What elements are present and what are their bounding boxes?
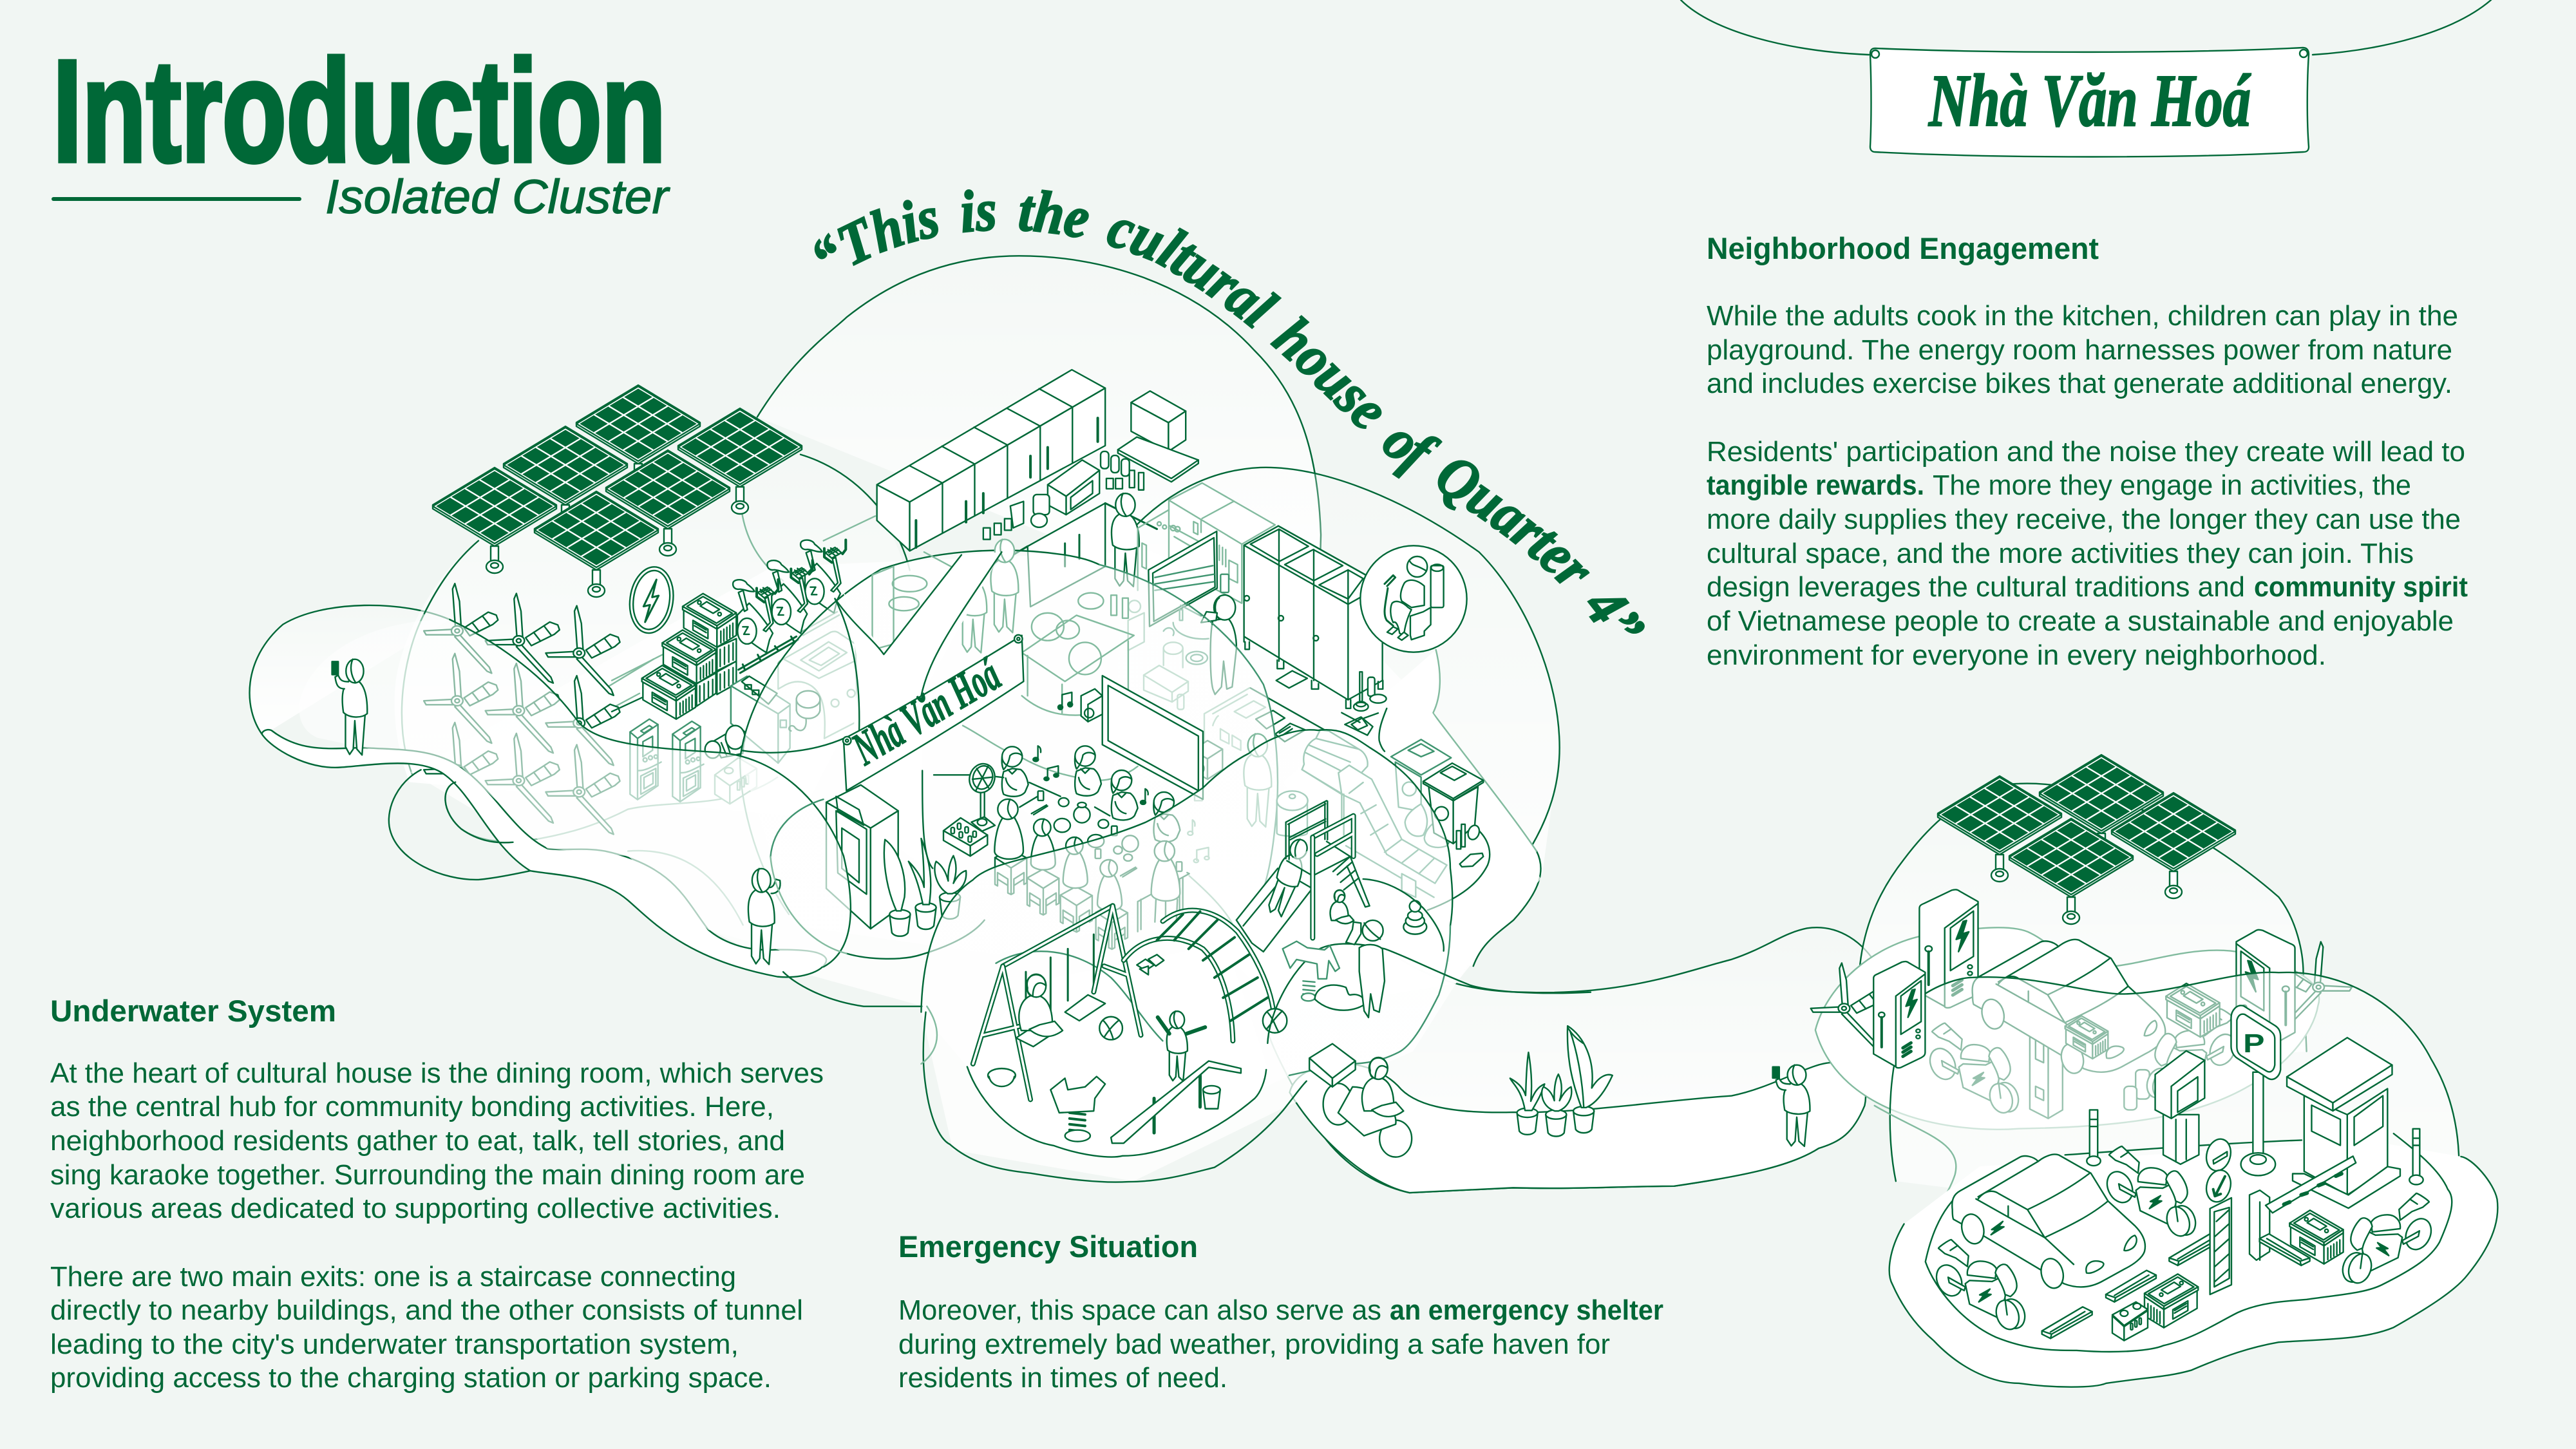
panel: kitchen dome [742,256,1321,644]
icon: upper small battery [2065,1016,2108,1059]
text block: emergency paragraph: residents in times of need. [898,1362,1227,1394]
icon: generator machine [778,632,858,739]
icon: battery by barrier [2289,1210,2344,1264]
text block: neighborhood paragraph 2: cultural space, and the more activities they can join. This [1707,538,2414,569]
panel: main floor outlines [770,799,985,1007]
subtitle: Isolated Cluster [325,170,670,223]
person: parent [1346,920,1385,1018]
parking front items [1873,961,2423,1260]
plants in tunnel [1510,1026,1613,1136]
icon: back table [1022,593,1134,715]
icon: energy bolt emblem [625,564,677,636]
text block: emergency paragraph: during extremely bad weather, providing a safe haven for [898,1329,1610,1360]
icon: energy pipe [739,612,839,673]
text block: neighborhood paragraph 2: The more they engage in activities, the [1933,469,2411,501]
icon: upper car [1973,940,2165,1076]
text block: neighborhood paragraph 2: design leverages the cultural traditions and [1707,571,2245,603]
icon: stools [995,849,1128,949]
text block: neighborhood paragraph 2: more daily supplies they receive, the longer they can use the [1707,504,2461,535]
person: kitchen worker [990,540,1018,632]
icon: bucket [1203,1086,1220,1109]
people: back row [1002,746,1180,842]
icon: front car [1952,1154,2145,1291]
table items [1032,791,1182,877]
panel: parking front dome [1875,972,2459,1249]
icon: delivery motorbike [1309,1044,1412,1157]
text block: underwater paragraph 2: There are two main exits: one is a staircase connecting [50,1261,736,1293]
icon: small battery front [2112,1302,2148,1341]
icon: plunger and bottle [1354,672,1387,711]
panel: parking rear dome [1815,784,2319,1130]
icon: round tank [1277,791,1308,836]
icon: coffee maker and canisters [983,495,1050,540]
icon: large-leaf plant [1567,1026,1613,1133]
energy floor lines [445,516,875,842]
icon: barrier gate [2249,1156,2356,1260]
icon: motorbike bottom left [1931,1240,2029,1332]
playground equipment [973,836,1412,1157]
text block: underwater paragraph 1: sing karaoke together. Surrounding the main dining room are [50,1159,805,1191]
icon: round signs and striped column [2203,1136,2234,1294]
text block: underwater paragraph 2: directly to nearby buildings, and the other consists of tunnel [50,1294,803,1326]
text block: underwater paragraph 1: neighborhood residents gather to eat, talk, tell stories, and [50,1125,785,1157]
icon: arch ladder [1124,911,1273,1041]
text block: neighborhood paragraph 1: While the adults cook in the kitchen, children can play in the [1707,300,2458,332]
icon: sink [1164,574,1229,665]
text block: underwater paragraph 1: At the heart of cultural house is the dining room, which serves [50,1057,824,1089]
Y-shaped walkway and hall interior [742,552,1203,868]
text block: neighborhood paragraph 2: community spirit [2254,571,2468,603]
icon: stacking toy [1403,901,1426,934]
icon: microwave [1048,460,1099,515]
vending and plants [826,785,966,936]
text block: neighborhood paragraph 2: Residents' participation and the noise they create will lead to [1707,436,2465,468]
panel: right tunnel dome [1267,927,1891,1193]
icon: potted plants [884,838,966,936]
icon: curb stops [2042,1234,2310,1338]
panel: solar panels over energy room [433,385,802,597]
icon: playground ball [1099,1017,1122,1039]
icon: charger stacks [630,719,704,802]
heading: Underwater System: Underwater System [50,994,336,1028]
icon: slide [1236,868,1312,952]
icon: ball 2 [1263,1009,1287,1033]
icon: standing fan [934,761,1003,831]
parking upper level items [1811,889,2352,1119]
person: standing in hall [1244,734,1271,827]
person: washing at sink [1201,595,1236,694]
panel: parking outer floor [1889,1133,2497,1387]
text block: neighborhood paragraph 2: of Vietnamese people to create a sustainable and enjoyable [1707,605,2454,637]
icon: wind turbines bottom row [424,723,620,835]
icon: range hood [1118,391,1198,482]
icon: balance beam [1111,1061,1241,1143]
icon: payment panel [2155,1051,2204,1164]
icon: wind turbines top row [424,583,620,696]
icon: big plant tip [1568,1028,1583,1043]
text block: underwater paragraph 2: providing access to the charging station or parking space. [50,1362,772,1394]
icon: playground floor right edge [1363,879,1444,951]
person: kid seated [1331,890,1354,923]
icon: floor drain [1213,716,1218,726]
text block: emergency paragraph: Moreover, this space can also serve as [898,1294,1381,1326]
heading: Neighborhood Engagement: Neighborhood Engagement [1707,231,2099,265]
icon: tunnel ceiling line [1267,943,1591,1043]
person: on right tunnel [1773,1065,1810,1146]
icon: climbing tower [1286,800,1370,938]
icon: swing set [973,905,1141,1099]
panel: main hall dome overlay [740,551,1278,954]
title: Introduction [53,30,666,192]
icon: hall note [1058,692,1072,710]
text block: neighborhood paragraph 2: environment for everyone in every neighborhood. [1707,639,2326,671]
icon: ticket terminal [2030,1025,2063,1119]
panel: solar panels over parking [1938,755,2235,924]
icon: floor battery [715,758,757,804]
icon: lower cabinet [979,503,1157,607]
icon: floor curves right [1379,708,1490,910]
icon: upper charger C [2236,930,2295,1048]
kitchen, back rooms [877,370,1198,607]
central ground fill [411,551,1541,1181]
walkway fill [844,552,1001,868]
icon: big battery front [2145,1274,2198,1328]
bathroom and back cabinets [1128,483,1387,800]
icon: back cabinets [1138,483,1275,603]
text block: neighborhood paragraph 1: playground. The energy room harnesses power from nature [1707,334,2452,366]
icon: parking sign: P [2243,1028,2265,1058]
panel: sign hanging string [1681,0,2491,55]
person: child on swing [1019,974,1063,1036]
icon: storage cylinder [789,691,820,731]
back counter, sink, people in light [873,540,1271,827]
person: kitchen right [1112,493,1139,587]
sign title: Nhà Văn Hoá [1928,60,2251,142]
subtitle rule [52,197,301,201]
icon: recycled cells [2124,1070,2150,1110]
banner: Nha Van Hoa: Nhà Văn Hoá [843,648,1009,775]
icon: big screen [1103,676,1203,799]
icon: garbage bags [1405,804,1450,848]
icon: upper wind turbine left [1811,963,1885,1049]
person: kitchen worker 2 [959,560,987,652]
floor curves [963,726,1232,923]
person: in tunnel lower left [748,869,781,965]
icon: small leafy plant [1542,1074,1571,1136]
icon: bollard right [2409,1129,2423,1184]
icon: charger B [1873,961,1925,1068]
icon: upper motorbike [1925,1023,2022,1116]
icon: guard booth [2287,1037,2400,1208]
person: left with phone [332,659,367,755]
parking upper vehicles [1925,940,2240,1116]
person: child on beam [1158,1011,1205,1081]
icon: parking sign [2231,1005,2280,1175]
icon: heart mat [1315,985,1365,1010]
people: front row [994,799,1180,922]
icon: music notes [1033,746,1209,862]
icon: shredder conveyor [1302,730,1447,897]
text block: emergency paragraph: an emergency shelter [1390,1294,1663,1326]
panel: sign board [1870,48,2309,157]
text block: neighborhood paragraph 2: tangible rewards. [1707,469,1924,501]
icon: upper cabinets [877,370,1105,551]
person: climbing child [1264,836,1313,918]
toilet inset [1360,545,1467,652]
icon: upper motorbike right [2143,1009,2240,1102]
climbing tower and right playground [1267,800,1591,1043]
energy room equipment [612,540,858,804]
panel: energy room dome [395,455,913,817]
icon: bowl [988,1068,1016,1086]
walkway edges [742,552,1001,868]
icon: front bin [1423,763,1483,844]
parking front vehicles and objects [1931,1136,2436,1341]
icon: speaker left [1081,689,1103,722]
icon: bottle crate [943,818,987,856]
icon: spring horse [1050,1077,1105,1142]
icon: second spring horse [1283,942,1340,1001]
heading: Emergency Situation: Emergency Situation [898,1229,1198,1264]
icon: wind turbines middle row [424,654,620,765]
panel: right dome and outer floor [1111,468,1560,1012]
panel: left tunnel dome overlay [299,620,851,967]
text block: underwater paragraph 1 [50,1057,824,1224]
icon: dining table [1019,782,1189,932]
icon: floor edge [612,655,731,712]
icon: motor on floor [705,726,745,758]
quote on curve: “This is the cultural house of Quarter 4” [814,189,1645,634]
energy room floor and turbines [424,516,875,842]
icon: upper wind turbine right [2278,942,2352,1028]
banner: Nha Van Hoa [843,635,1023,791]
panel: left tunnel dome [250,605,450,735]
text block: neighborhood paragraph 1: and includes exercise bikes that generate additional energy. [1707,368,2452,399]
icon: floor grate and worktop [1204,688,1325,762]
icon: toilet stalls [1244,526,1383,708]
text block: underwater paragraph 1: as the central hub for community bonding activities. Here, [50,1091,774,1122]
icon: electrical cabinet [731,676,790,763]
icon: speaker right [1193,741,1222,800]
text block: underwater paragraph 1: various areas dedicated to supporting collective activities. [50,1193,781,1224]
icon: snake plant [1510,1052,1544,1135]
icon: exercise bikes [733,540,846,652]
text block: neighborhood paragraph 2 [1707,436,2468,671]
icon: battery stack [642,594,736,719]
icon: light items [1128,600,1188,710]
icon: wall note [1276,671,1307,688]
icon: upper battery [2166,983,2220,1037]
icon: motorbike centre [2102,1146,2199,1239]
icon: sink unit [873,552,961,650]
text block: underwater paragraph 2 [50,1261,803,1394]
icon: upper charger A [1919,889,1978,1008]
icon: dustpan and brush [1341,713,1378,735]
icon: toy blocks [1137,954,1164,975]
dining room [934,726,1232,949]
panel: lower energy floor loop [389,770,530,880]
icon: vending machine [826,785,898,929]
icon: wall mirror [1148,531,1217,627]
icon: bollard left [2087,1110,2101,1166]
text block: underwater paragraph 2: leading to the city's underwater transportation system, [50,1329,739,1360]
panel: playground dome overlay [921,730,1452,1156]
text block: emergency paragraph [898,1294,1663,1394]
text block: neighborhood paragraph 1 [1707,300,2458,399]
bins and conveyor [1277,708,1490,910]
icon: jars and bottles [1101,451,1144,490]
panel: tunnel floor left [262,730,826,977]
panel: playground floor [921,943,1307,1182]
icon: back bin [1391,739,1451,811]
icon: motorbike right [2339,1193,2436,1286]
icon: bottles and tape [1457,824,1483,867]
